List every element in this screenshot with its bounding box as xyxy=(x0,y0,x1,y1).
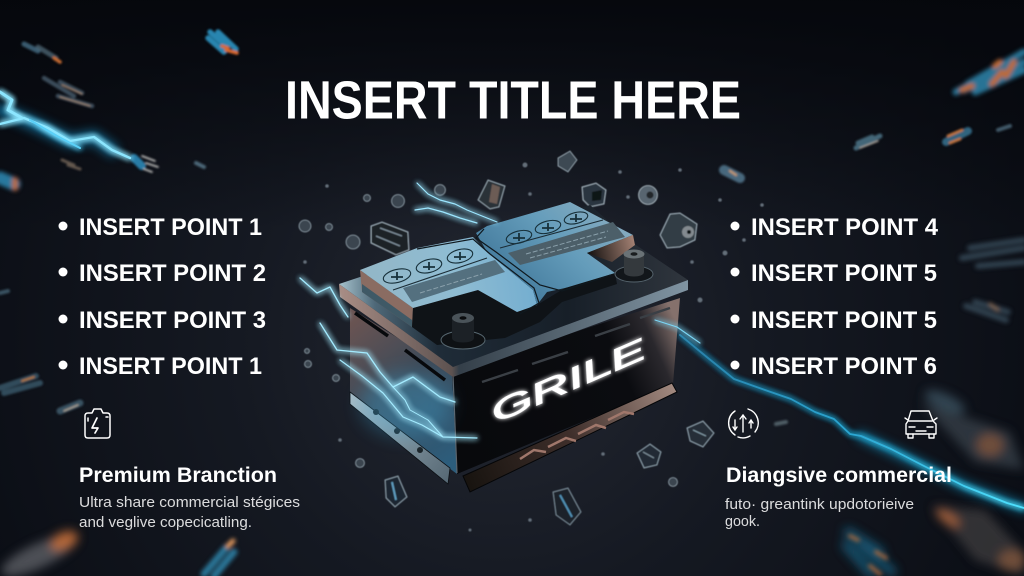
battery upper cover right xyxy=(476,202,633,305)
battery base flange left xyxy=(350,392,450,484)
bullet list: right xyxy=(730,214,938,380)
bullet list: right: INSERT POINT 4 xyxy=(751,214,938,241)
battery side vents xyxy=(355,313,445,380)
part: clip top centre xyxy=(478,180,505,209)
text block: diangsive commercial: gook. xyxy=(725,514,760,530)
bullet list: left: INSERT POINT 1 xyxy=(79,353,262,380)
part: bracket right xyxy=(660,213,697,248)
bullet list: left: INSERT POINT 2 xyxy=(79,260,266,287)
battery upper cover left xyxy=(360,237,537,312)
battery terminal left xyxy=(441,313,485,349)
battery seam lines xyxy=(417,229,611,314)
part: nut top right xyxy=(638,186,658,204)
lightning: upper left streak xyxy=(0,92,130,158)
text block: diangsive commercial: Diangsive commercial xyxy=(726,463,952,487)
text block: premium branction: Premium Branction xyxy=(79,463,277,487)
text block: premium branction xyxy=(79,463,300,531)
blue glow on left face xyxy=(360,373,450,437)
floating parts around the battery xyxy=(299,151,764,532)
battery xyxy=(339,202,688,492)
bullet list: right: INSERT POINT 5 xyxy=(751,307,937,334)
battery left side face xyxy=(350,308,457,474)
text block: premium branction: and veglive copecicatling. xyxy=(79,515,252,531)
bullet list: right: INSERT POINT 6 xyxy=(751,353,937,380)
battery plate edge xyxy=(339,280,688,377)
text block: diangsive commercial: futo· greantink updotorieive xyxy=(725,497,914,513)
bullet list: left: INSERT POINT 3 xyxy=(79,307,266,334)
part: block top centre right xyxy=(582,183,606,207)
bullet list: left: INSERT POINT 1 xyxy=(79,214,262,241)
part: lower right block xyxy=(637,444,661,468)
icon: circular arrows xyxy=(729,409,758,438)
title: INSERT TITLE HERE xyxy=(285,70,741,130)
text block: premium branction: Ultra share commercial stégices xyxy=(79,495,300,511)
battery vent caps xyxy=(382,210,589,286)
battery label plates xyxy=(403,260,505,302)
icon: battery with bolt xyxy=(85,409,110,438)
battery top plate xyxy=(339,205,688,367)
battery terminal right xyxy=(615,250,653,282)
part: small clip top xyxy=(558,151,577,172)
battery base flange front xyxy=(463,383,677,492)
battery logo: GRILE xyxy=(486,333,652,429)
battery dark cover block xyxy=(412,273,617,345)
battery cover side wall xyxy=(360,270,413,327)
battery notch wall xyxy=(587,235,635,262)
part: lower left clip xyxy=(385,476,407,507)
bullet list: right: INSERT POINT 5 xyxy=(751,260,937,287)
part: connector left xyxy=(371,222,409,255)
part: lower centre clip xyxy=(553,488,581,525)
text block: diangsive commercial xyxy=(725,463,952,530)
battery front face xyxy=(452,298,680,474)
bullet list: left xyxy=(58,214,266,380)
lightning: lower right streak xyxy=(680,335,1024,508)
part: right block xyxy=(687,421,714,447)
lightning: around battery xyxy=(300,183,700,438)
icon: car xyxy=(905,411,937,438)
